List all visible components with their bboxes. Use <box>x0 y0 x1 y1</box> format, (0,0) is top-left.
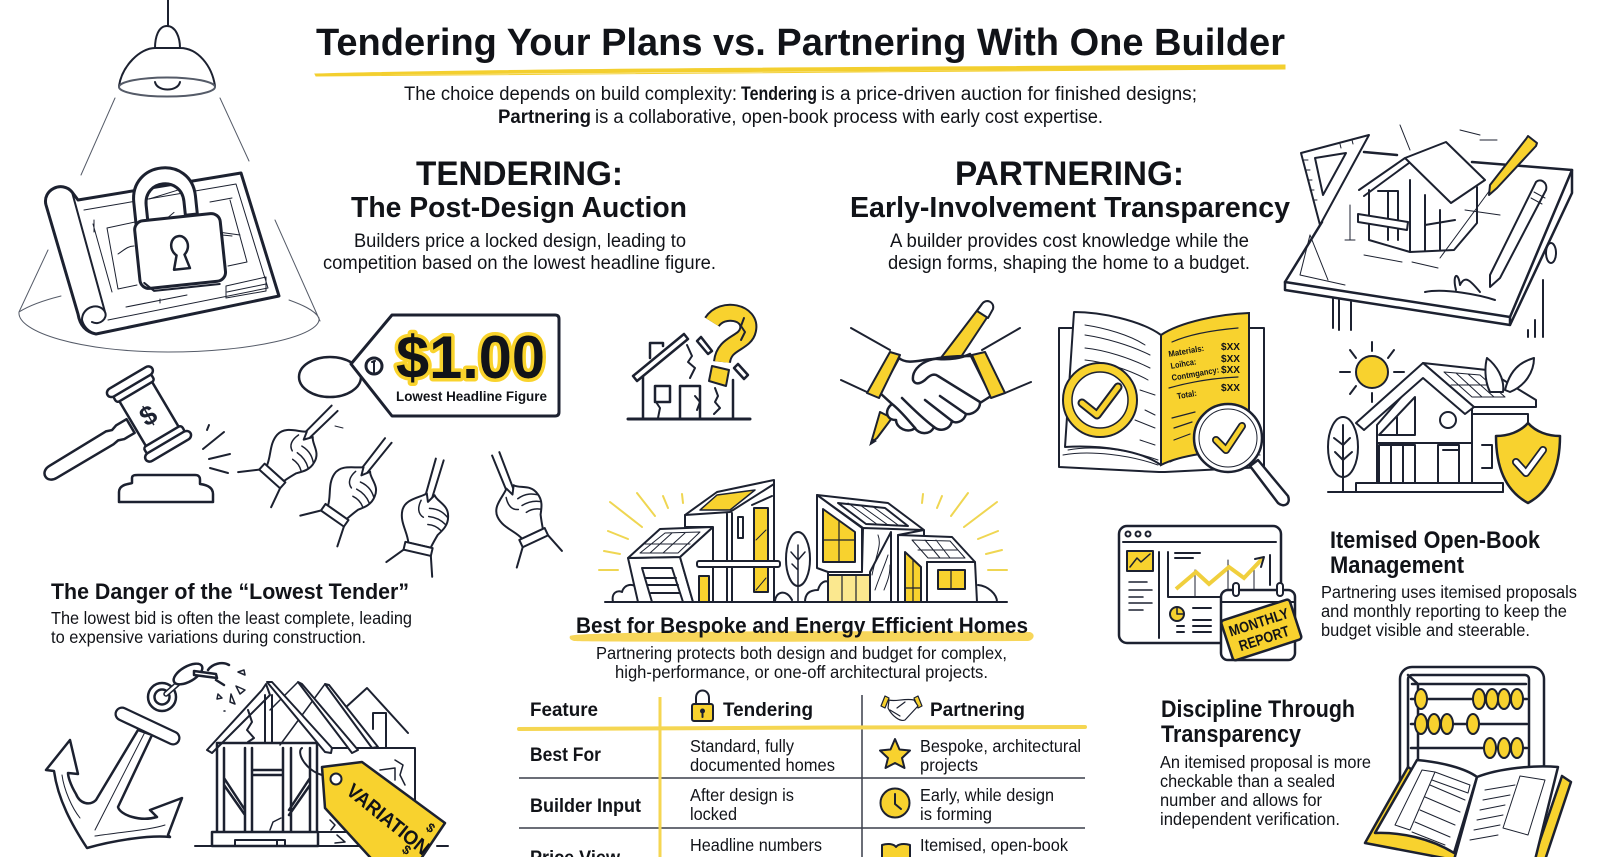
row: price view: Itemised, open-book <box>920 835 1068 855</box>
icon: open-book cost ledger <box>1059 312 1289 505</box>
row: builder input: Early, while design <box>920 785 1054 805</box>
row: builder input: locked <box>690 804 737 824</box>
icon: open-book cost ledger: $XX <box>1221 364 1240 376</box>
icon: handshake with pencil <box>841 301 1031 446</box>
title: Tendering Your Plans vs. Partnering With One Builder <box>316 22 1285 64</box>
text: danger of the lowest tender <box>51 579 412 647</box>
icon: gavel <box>23 365 230 512</box>
icon: variation tag <box>322 762 445 857</box>
heading: best for bespoke: Partnering protects both design and budget for complex, <box>596 643 1007 663</box>
comparison table <box>519 690 1085 857</box>
icon: anchor with broken chain <box>46 660 245 848</box>
heading: tendering: The Post-Design Auction <box>351 192 687 224</box>
heading: partnering: A builder provides cost knowledge while the <box>890 231 1249 252</box>
ledger lines: Loihca: <box>1170 356 1197 371</box>
heading: tendering: Builders price a locked design, leading to <box>354 231 686 252</box>
text: itemised open-book management: budget visible and steerable. <box>1321 620 1530 640</box>
row: best for: Standard, fully <box>690 736 794 756</box>
ledger lines: Materials: <box>1168 343 1205 359</box>
icon: abacus and open book <box>1365 667 1571 857</box>
heading: best for bespoke <box>570 613 1034 682</box>
price: $1.00 <box>396 324 545 391</box>
row: best for: Bespoke, architectural <box>920 736 1081 756</box>
heading: best for bespoke: Best for Bespoke and Energy Efficient Homes <box>576 613 1028 638</box>
icon: star <box>880 739 910 768</box>
icon: book <box>882 844 910 857</box>
icon: padlock <box>692 690 713 721</box>
text: danger of the lowest tender: The Danger of the “Lowest Tender” <box>51 579 409 604</box>
row: price view: Headline numbers <box>690 835 822 855</box>
heading: tendering: TENDERING: <box>416 155 623 193</box>
ledger lines: Contmgancy: <box>1171 365 1220 383</box>
highlight <box>570 631 1034 642</box>
text: itemised open-book management: Itemised Open-Book <box>1330 527 1541 554</box>
heading: tendering: competition based on the lowest headline figure. <box>323 253 716 274</box>
text: itemised open-book management <box>1321 527 1577 640</box>
intro text: is a price-driven auction for finished designs; <box>821 84 1197 105</box>
icon: locked blueprint <box>45 162 279 334</box>
icon: small handshake <box>881 696 922 720</box>
icon: price tag <box>299 315 559 416</box>
text: itemised open-book management: and monthly reporting to keep the <box>1321 601 1567 621</box>
text: itemised open-book management: Management <box>1330 552 1464 579</box>
header row: Feature <box>530 699 598 721</box>
title underline <box>315 65 1285 76</box>
heading: partnering: Early-Involvement Transparency <box>850 192 1290 224</box>
heading: tendering <box>323 155 716 274</box>
text: discipline through transparency <box>1160 696 1371 829</box>
header row: Partnering <box>930 699 1025 721</box>
text: danger of the lowest tender: The lowest bid is often the least complete, leading <box>51 608 412 628</box>
intro text: Partnering <box>498 107 591 128</box>
heading: partnering: PARTNERING: <box>955 155 1184 193</box>
icon: gavel: $ <box>134 399 162 432</box>
icon: open-book cost ledger: $XX <box>1221 353 1240 365</box>
intro text <box>404 84 1197 128</box>
icon: monthly report dashboard <box>1119 526 1302 661</box>
icon: energy efficient homes <box>599 480 1007 602</box>
icon: monthly report dashboard: REPORT <box>1237 623 1292 655</box>
ledger lines: Total: <box>1176 388 1198 401</box>
icon: sustainable house with shield <box>1328 342 1560 503</box>
row: price view <box>530 835 1068 857</box>
text: discipline through transparency: Discipline Through <box>1161 696 1355 723</box>
row: builder input: Builder Input <box>530 795 641 817</box>
row: best for: Best For <box>530 744 601 766</box>
text: danger of the lowest tender: to expensive variations during construction. <box>51 627 366 647</box>
text: discipline through transparency: checkable than a sealed <box>1160 771 1335 791</box>
icon: open-book cost ledger: $XX <box>1221 341 1240 353</box>
row: best for: documented homes <box>690 755 835 775</box>
row: builder input: After design is <box>690 785 794 805</box>
heading: partnering <box>850 155 1290 274</box>
text: discipline through transparency: Transparency <box>1161 721 1302 748</box>
header row <box>530 690 1025 721</box>
text: itemised open-book management: Partnering uses itemised proposals <box>1321 582 1577 602</box>
ledger lines <box>1167 341 1223 401</box>
row: builder input <box>530 785 1054 824</box>
intro text: The choice depends on build complexity: <box>404 84 737 105</box>
icon: timber frame house <box>195 682 448 846</box>
text: discipline through transparency: An itemised proposal is more <box>1160 752 1371 772</box>
text: discipline through transparency: independent verification. <box>1160 809 1340 829</box>
header row: Tendering <box>723 699 813 721</box>
heading: partnering: design forms, shaping the home to a budget. <box>888 253 1250 274</box>
icon: monthly report dashboard: MONTHLY <box>1227 605 1291 640</box>
row: builder input: is forming <box>920 804 992 824</box>
icon: variation tag: $ <box>423 820 439 836</box>
icon: drafting table with house sketch <box>1285 125 1572 337</box>
intro text: Tendering <box>741 84 817 105</box>
tag caption: Lowest Headline Figure <box>396 388 547 404</box>
icon: cracked house with question mark <box>628 313 750 419</box>
row: best for: projects <box>920 755 978 775</box>
text: discipline through transparency: number and allows for <box>1160 790 1322 810</box>
row: best for <box>530 736 1081 775</box>
icon: spotlight lamp <box>19 0 320 352</box>
icon: bidding hands <box>235 389 564 577</box>
icon: clock <box>880 788 910 818</box>
icon: open-book cost ledger: $XX <box>1221 382 1240 394</box>
heading: best for bespoke: high-performance, or one-off architectural projects. <box>615 662 988 682</box>
intro text: is a collaborative, open-book process with early cost expertise. <box>595 107 1103 128</box>
